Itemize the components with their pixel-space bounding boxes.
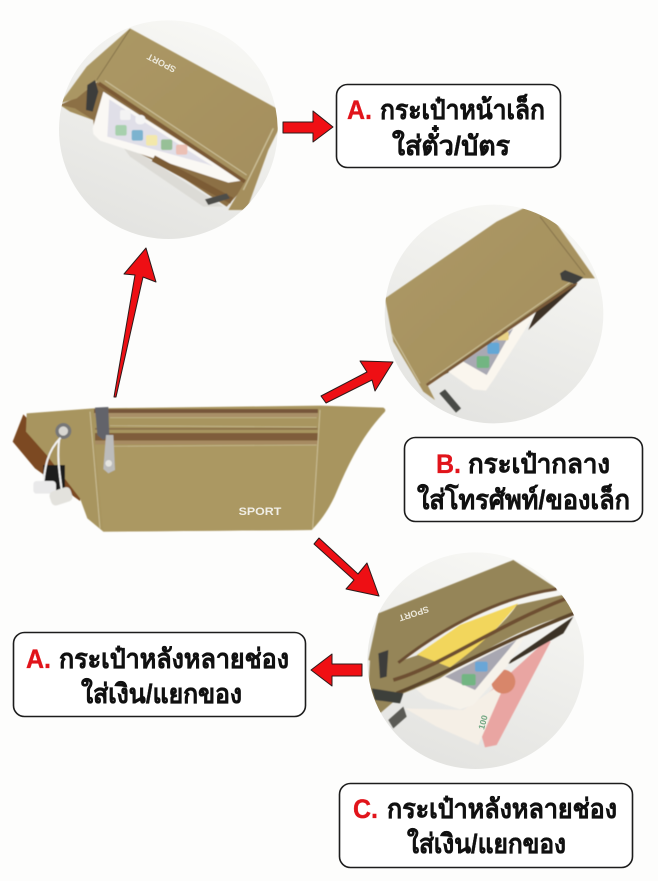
circle photo: front pocket <box>59 20 280 239</box>
callout left: back pocket: ใส่เงิน/แยกของ <box>81 678 242 709</box>
earphones <box>43 465 65 492</box>
callout A: front pocket: A. <box>347 95 372 125</box>
main product: waist bag <box>13 406 385 532</box>
circle photo: back pocket <box>367 552 584 769</box>
money <box>473 640 551 747</box>
eyelet <box>55 423 71 439</box>
phone <box>413 633 527 709</box>
callout C: back pocket: กระเป๋าหลังหลายช่อง <box>387 794 617 824</box>
arrow: to front pocket <box>114 248 156 397</box>
callout B: middle pocket: ใส่โทรศัพท์/ของเล็ก <box>417 482 630 515</box>
label: SPORT on bag: SPORT <box>239 506 282 518</box>
strap <box>13 414 82 501</box>
callout B: middle pocket <box>404 438 642 522</box>
callout B: middle pocket: B. <box>436 449 461 479</box>
label: SPORT on bag: SPORT <box>397 604 430 623</box>
bag flaps <box>368 593 574 713</box>
yellow card <box>417 603 518 667</box>
callout left: back pocket: กระเป๋าหลังหลายช่อง <box>59 644 289 674</box>
callout C: back pocket: ใส่เงิน/แยกของ <box>407 828 566 859</box>
bag body <box>26 406 385 532</box>
callout A: front pocket: ใส่ตั๋ว/บัตร <box>392 125 510 161</box>
arrow: to back pocket <box>314 538 379 596</box>
callout A: front pocket: กระเป๋าหน้าเล็ก <box>380 92 545 125</box>
callout C: back pocket <box>340 784 632 868</box>
callout left: back pocket: A. <box>26 644 51 674</box>
zippers <box>95 407 109 440</box>
label: banknote value: 100 <box>476 714 490 731</box>
arrow: to label A <box>283 111 333 142</box>
label: SPORT on flap: SPORT <box>145 51 178 74</box>
callout left: back pocket <box>14 632 306 716</box>
arrow: to middle pocket <box>321 361 393 403</box>
callout B: middle pocket: กระเป๋ากลาง <box>468 449 610 479</box>
arrow: to left label <box>311 654 362 686</box>
circle photo: middle pocket <box>385 200 603 423</box>
callout C: back pocket: C. <box>353 794 378 824</box>
callout A: front pocket <box>336 84 560 168</box>
